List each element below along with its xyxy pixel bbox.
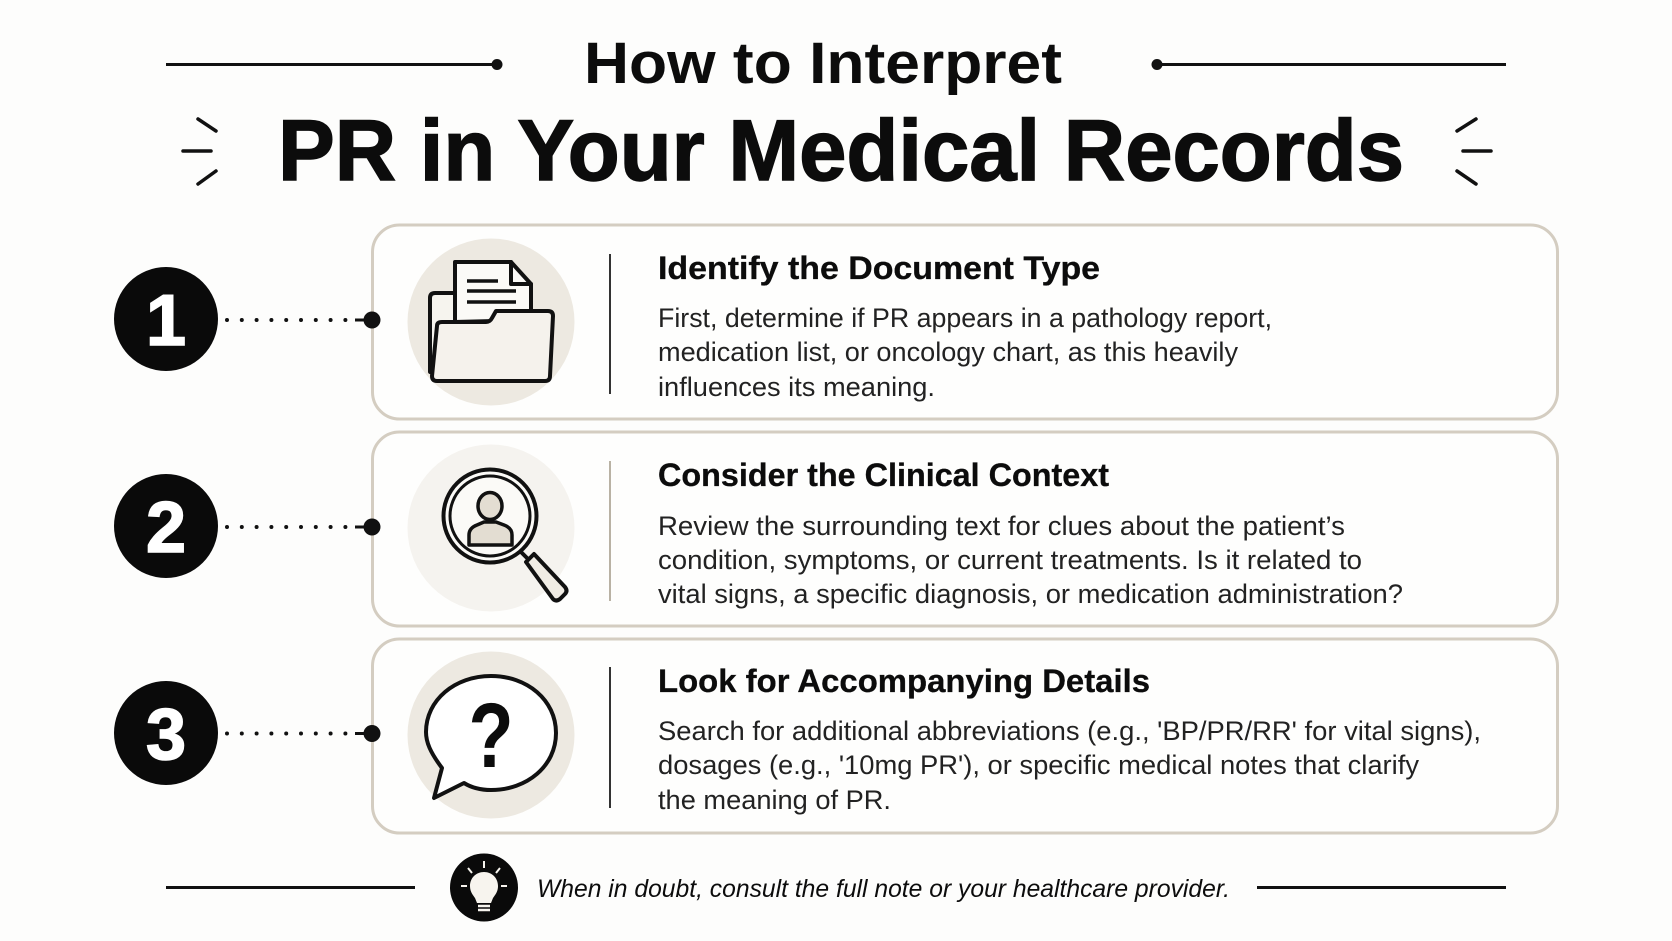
number badge 2: 2: [146, 488, 186, 568]
sparks right: [1457, 119, 1491, 184]
step 1: [114, 225, 1558, 419]
step 3 body: the meaning of PR.: [658, 785, 891, 815]
footer rule left: [166, 886, 415, 889]
number badge 1: [114, 267, 218, 371]
step 1 body: influences its meaning.: [658, 372, 935, 402]
number badge 1: 1: [146, 281, 186, 361]
step 1 body: [658, 303, 1272, 402]
divider 1: [609, 254, 611, 394]
step 1 body: First, determine if PR appears in a pathology report,: [658, 303, 1272, 333]
step 2 body: vital signs, a specific diagnosis, or medication administration?: [658, 579, 1403, 609]
number badge 3: [114, 681, 218, 785]
step 2: [114, 432, 1558, 626]
top rule right: [1152, 59, 1506, 70]
icon: speech bubble with question mark: [408, 652, 574, 818]
title line 1: How to Interpret: [584, 31, 1062, 96]
panel: step 3 card: [372, 639, 1558, 833]
sparks left: [183, 119, 216, 184]
step 3: [114, 639, 1558, 833]
step 1 heading: Identify the Document Type: [658, 250, 1100, 286]
footer note: [166, 854, 1506, 922]
step 3 heading: Look for Accompanying Details: [658, 663, 1150, 699]
divider 3: [609, 667, 611, 808]
footer rule right: [1257, 886, 1506, 889]
icon: magnifier with person: [408, 444, 574, 612]
connector 3: [227, 725, 380, 742]
step 2 body: condition, symptoms, or current treatments. Is it related to: [658, 545, 1362, 575]
icon: light bulb: [450, 854, 518, 922]
divider 2: [609, 461, 611, 601]
top rule left: [166, 59, 502, 70]
panel: step 2 card: [372, 432, 1558, 626]
panel: step 1 card: [372, 225, 1558, 419]
icon: speech bubble with question mark: ?: [468, 685, 514, 787]
number badge 2: [114, 474, 218, 578]
step 1 body: medication list, or oncology chart, as this heavily: [658, 337, 1239, 367]
step 2 body: [658, 511, 1403, 609]
step 3 body: [658, 716, 1481, 815]
connector 2: [227, 518, 380, 536]
number badge 3: 3: [146, 695, 186, 775]
connector 1: [227, 312, 380, 328]
title line 2: PR in Your Medical Records: [278, 103, 1404, 199]
step 2 body: Review the surrounding text for clues about the patient’s: [658, 511, 1345, 541]
footer text: When in doubt, consult the full note or your healthcare provider.: [537, 875, 1230, 903]
step 2 heading: Consider the Clinical Context: [658, 457, 1109, 493]
title block: [166, 31, 1506, 199]
step 3 body: dosages (e.g., '10mg PR'), or specific medical notes that clarify: [658, 750, 1420, 780]
step 3 body: Search for additional abbreviations (e.g., 'BP/PR/RR' for vital signs),: [658, 716, 1481, 746]
icon: folder with document: [408, 238, 574, 406]
